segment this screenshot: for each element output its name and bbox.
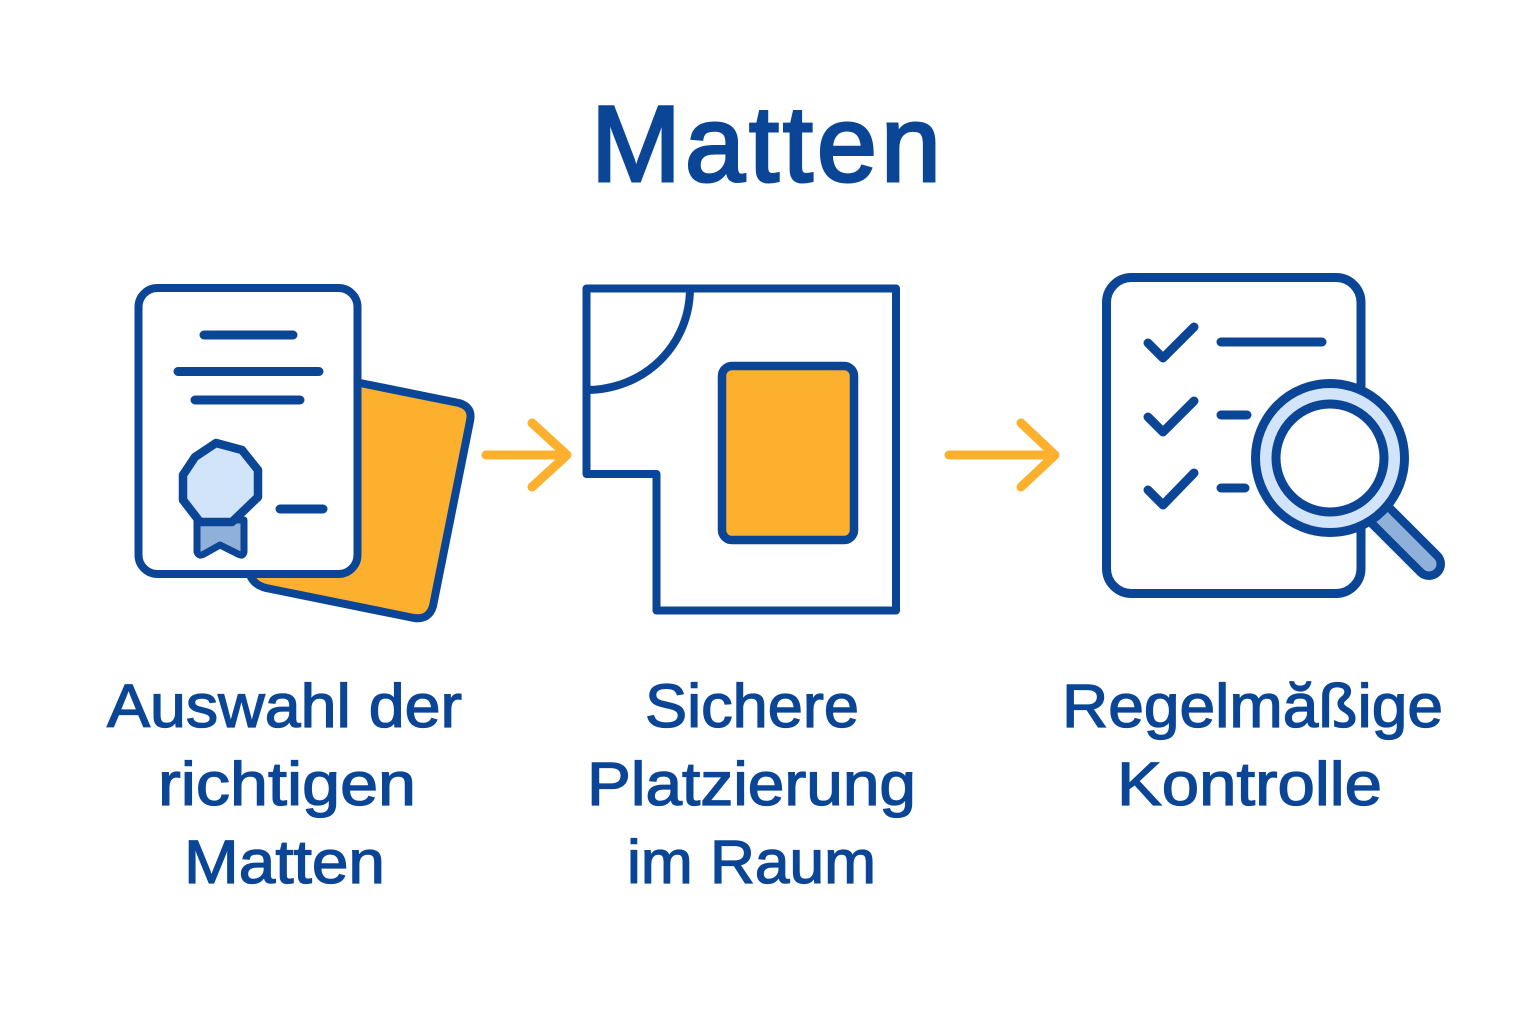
icon: certificate with mat bbox=[138, 288, 471, 618]
ribbon bbox=[197, 520, 244, 555]
arrow 2 bbox=[949, 423, 1055, 487]
room outline bbox=[586, 288, 896, 610]
label: step 1: richtigen bbox=[158, 750, 416, 818]
mat in room bbox=[722, 366, 854, 540]
door swing bbox=[586, 288, 690, 390]
icon: floor plan with mat bbox=[586, 288, 896, 610]
certificate text lines bbox=[178, 335, 323, 509]
label: step 3 bbox=[1062, 672, 1443, 818]
checklist document bbox=[1106, 278, 1361, 594]
magnifier handle bbox=[1375, 510, 1429, 564]
title: Matten bbox=[591, 83, 941, 204]
label: step 1 bbox=[107, 672, 462, 896]
certificate document bbox=[138, 288, 358, 574]
check marks bbox=[1148, 327, 1194, 505]
checklist lines bbox=[1221, 342, 1322, 488]
magnifier lens bbox=[1256, 384, 1404, 532]
label: step 2: im Raum bbox=[627, 828, 876, 896]
label: step 2: Platzierung bbox=[587, 750, 916, 818]
arrow 1 bbox=[486, 423, 567, 487]
icon: checklist with magnifier bbox=[1106, 278, 1429, 594]
seal bbox=[183, 443, 258, 522]
label: step 2: Sichere bbox=[645, 672, 859, 740]
orange mat sample bbox=[250, 382, 471, 618]
label: step 1: Matten bbox=[184, 828, 385, 896]
label: step 1: Auswahl der bbox=[107, 672, 462, 740]
label: step 3: Regelmăßige bbox=[1062, 672, 1443, 740]
label: step 3: Kontrolle bbox=[1117, 750, 1382, 818]
label: step 2 bbox=[587, 672, 916, 896]
